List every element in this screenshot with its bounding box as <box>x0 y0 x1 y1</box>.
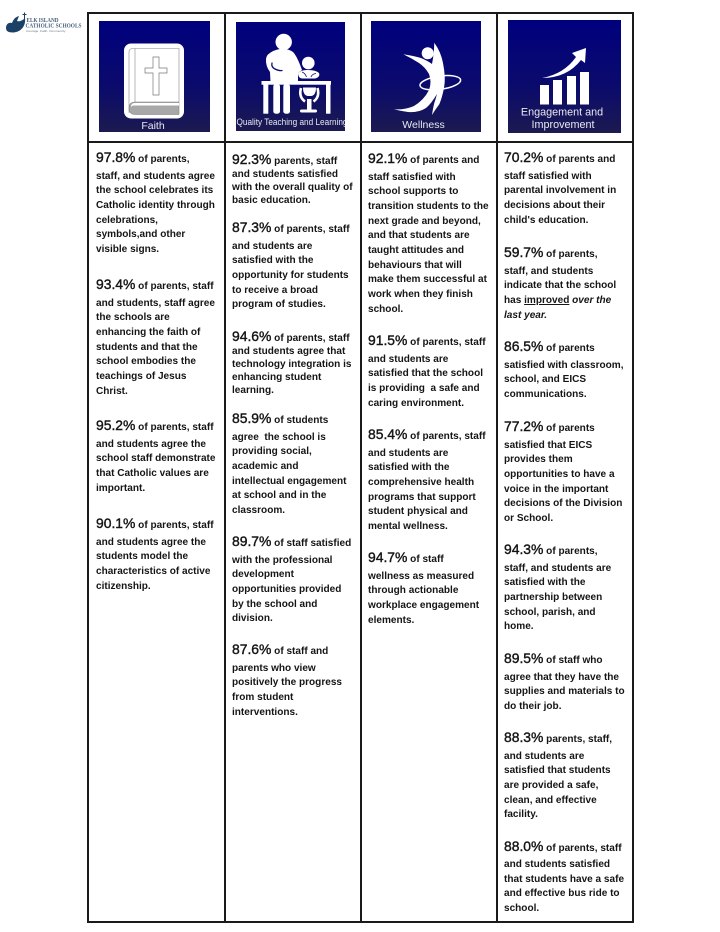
logo: Elk Island Catholic Schools: Courage. Faith. Community. <box>26 29 66 33</box>
stat: 92.1%: next grade and beyond, <box>368 216 481 227</box>
stat: 85.4%: mental wellness. <box>368 521 448 532</box>
icon: Engagement and Improvement <box>508 20 621 133</box>
stat: 93.4%: the schools are <box>96 312 170 323</box>
stat: 92.1%: and that students are <box>368 230 470 241</box>
stat: 92.3%: 92.3% parents, staff <box>232 151 337 167</box>
stat: 77.2%: provides them <box>504 454 573 465</box>
stat: 93.4%: 93.4% of parents, staff <box>96 276 214 292</box>
stat: 77.2%: 77.2% of parents <box>504 418 595 434</box>
stat: 87.6%: positively the progress <box>232 677 342 688</box>
stat: 85.9%: at school and in the <box>232 490 326 501</box>
column: Quality Teaching and Learning results <box>232 151 353 718</box>
stat: 87.6%: interventions. <box>232 707 298 718</box>
stat: 94.7% <box>368 549 479 626</box>
stat: 94.6%: learning. <box>232 385 274 396</box>
stat: 85.4%: comprehensive health <box>368 477 474 488</box>
stat: 94.6%: enhancing student <box>232 372 321 383</box>
stat: 92.1%: staff satisfied with <box>368 172 456 182</box>
stat: 89.5% <box>504 650 625 712</box>
stat: 77.2% <box>504 418 622 524</box>
stat: 89.5%: 89.5% of staff who <box>504 650 603 666</box>
stat: 95.2%: and students agree the <box>96 438 206 450</box>
stat: 94.7%: workplace engagement <box>368 600 479 611</box>
stat: 85.4%: programs that support <box>368 492 476 503</box>
stat: 91.5%: is providing a safe and <box>368 383 480 394</box>
icon: Wellness <box>371 21 481 132</box>
stat: 89.7%: with the professional <box>232 554 332 566</box>
stat: 88.0%: and students satisfied <box>504 859 610 870</box>
stat: 91.5%: 91.5% of parents, staff <box>368 332 486 348</box>
stat: 70.2%: staff satisfied with <box>504 170 592 182</box>
stat: 88.3%: satisfied that students <box>504 765 611 776</box>
stat: 89.7%: opportunities provided <box>232 584 341 595</box>
stat: 77.2%: or School. <box>504 513 553 524</box>
stat: 92.3%: with the overall quality of <box>232 182 353 193</box>
stat: 97.8%: celebrations, <box>96 215 158 226</box>
stat: 89.7%: division. <box>232 613 273 624</box>
stat: 93.4%: students and that the <box>96 342 198 353</box>
stat: 85.4%: and students are <box>368 448 448 458</box>
stat: 85.9%: 85.9% of students <box>232 410 328 426</box>
stat: 93.4%: teachings of Jesus <box>96 371 186 382</box>
stat: 94.3%: partnership between <box>504 592 602 603</box>
stat: 85.9%: academic and <box>232 461 298 472</box>
stat: 95.2%: school staff demonstrate <box>96 453 215 464</box>
stat: 77.2%: satisfied that EICS <box>504 440 592 450</box>
stat: 92.1%: 92.1% of parents and <box>368 150 479 166</box>
stat: 95.2% <box>96 417 216 494</box>
stat: 92.1%: school. <box>368 304 403 315</box>
stat: 94.6%: and students agree that <box>232 346 345 356</box>
stat: 89.7%: development <box>232 569 294 580</box>
stat: 86.5%: satisfied with classroom, <box>504 360 623 370</box>
stat: 97.8%: symbols,and other <box>96 229 185 240</box>
stat: 90.1%: 90.1% of parents, staff <box>96 515 214 531</box>
stat: 92.1%: transition students to the <box>368 201 489 212</box>
stat: 70.2%: 70.2% of parents and <box>504 149 615 165</box>
logo: Elk Island Catholic Schools: ELK ISLAND <box>26 18 58 24</box>
stat: 91.5% <box>368 332 486 409</box>
stat: 91.5%: caring environment. <box>368 398 464 409</box>
stat: 92.1%: make them successful at <box>368 274 487 285</box>
stat: 88.0%: that students have a safe <box>504 874 624 885</box>
stat: 95.2%: important. <box>96 483 145 494</box>
stat: 92.3%: basic education. <box>232 195 311 206</box>
stat: 85.4%: student physical and <box>368 506 468 517</box>
stat: 86.5% <box>504 338 623 400</box>
stat: 95.2%: that Catholic values are <box>96 468 209 479</box>
stat: 89.5%: agree that they have the <box>504 672 619 682</box>
icon: Wellness: Wellness <box>402 119 445 131</box>
stat: 94.6%: technology integration is <box>232 359 351 370</box>
stat: 85.9%: intellectual engagement <box>232 476 346 487</box>
stat: 87.3%: program of studies. <box>232 299 326 310</box>
stat: 86.5%: school, and EICS <box>504 374 586 385</box>
logo: Elk Island Catholic Schools <box>6 12 82 33</box>
stat: 88.0%: and effective bus ride to <box>504 888 620 899</box>
stat: 87.3%: 87.3% of parents, staff <box>232 219 350 235</box>
stat: 77.2%: voice in the important <box>504 484 608 495</box>
stat: 90.1%: students model the <box>96 551 188 562</box>
stat: 88.0%: school. <box>504 903 539 914</box>
stat: 93.4% <box>96 276 215 397</box>
stat: 87.3%: and students are <box>232 240 312 252</box>
stat: 88.3%: clean, and effective <box>504 795 597 806</box>
stat: 85.4%: 85.4% of parents, staff <box>368 426 486 442</box>
stat: 88.3%: are provided a safe, <box>504 780 598 791</box>
stat: 94.6%: 94.6% of parents, staff <box>232 328 350 344</box>
stat: 97.8%: Catholic identity through <box>96 200 215 211</box>
stat: 87.3% <box>232 219 350 310</box>
stat: 93.4%: and students, staff agree <box>96 298 215 308</box>
icon: Faith bible <box>99 21 210 132</box>
stat: 85.4% <box>368 426 486 532</box>
stat: 95.2%: 95.2% of parents, staff <box>96 417 214 433</box>
stat: 88.3%: 88.3% parents, staff, <box>504 729 612 745</box>
stat: 91.5%: satisfied that the school <box>368 368 483 379</box>
stat: 88.3%: and students are <box>504 750 584 762</box>
stat: 85.9%: providing social, <box>232 446 312 457</box>
stat: 94.3%: staff, and students are <box>504 562 611 574</box>
stat: 59.7%: has improved over the <box>504 295 611 306</box>
stat: 70.2% <box>504 149 616 226</box>
stat: 87.3%: to receive a broad <box>232 285 318 296</box>
stat: 92.3%: and students satisfied <box>232 168 338 180</box>
stat: 89.5%: do their job. <box>504 701 562 712</box>
column: Wellness results <box>368 150 489 626</box>
stat: 89.7%: 89.7% of staff satisfied <box>232 533 351 549</box>
stat: 88.3%: facility. <box>504 809 538 820</box>
stat: 94.7%: wellness as measured <box>368 570 474 582</box>
stat: 88.0%: 88.0% of parents, staff <box>504 838 622 854</box>
stat: 94.3%: 94.3% of parents, <box>504 541 598 557</box>
stat: 59.7%: 59.7% of parents, <box>504 244 598 260</box>
stat: 89.5%: supplies and materials to <box>504 686 625 697</box>
stat: 70.2%: parental involvement in <box>504 185 616 196</box>
stat: 94.7%: elements. <box>368 615 414 626</box>
stat: 88.0% <box>504 838 624 914</box>
stat: 92.1%: work when they finish <box>368 289 473 300</box>
stat: 94.6% <box>232 328 352 396</box>
stat: 93.4%: school embodies the <box>96 356 196 367</box>
stat: 91.5%: and students are <box>368 354 448 364</box>
stat: 87.3%: opportunity for students <box>232 270 349 281</box>
stat: 92.1%: behaviours that will <box>368 260 462 271</box>
stat: 89.7%: by the school and <box>232 599 317 610</box>
stat: 90.1%: citizenship. <box>96 581 151 592</box>
stat: 97.8%: the school celebrates its <box>96 185 213 196</box>
stat: 86.5%: 86.5% of parents <box>504 338 595 354</box>
icon: Quality Teaching and Learning <box>236 22 345 131</box>
stat: 87.3%: satisfied with the <box>232 255 314 266</box>
icon: Faith bible: Faith <box>141 120 165 132</box>
icon: Engagement and Improvement: Engagement and <box>521 106 603 118</box>
stat: 85.9%: agree the school is <box>232 432 326 442</box>
column: Faith results <box>96 149 216 592</box>
stat: 94.3%: home. <box>504 621 534 632</box>
stat: 88.3% <box>504 729 612 820</box>
stat: 92.1% <box>368 150 489 315</box>
stat: 94.3%: satisfied with the <box>504 577 586 588</box>
stat: 90.1%: and students agree the <box>96 536 206 548</box>
stat: 77.2%: opportunities to have a <box>504 469 615 480</box>
stat: 85.9%: classroom. <box>232 505 285 516</box>
stat: 59.7%: indicate that the school <box>504 280 616 291</box>
stat: 97.8%: 97.8% of parents, <box>96 149 190 165</box>
stat: 92.1%: school supports to <box>368 186 458 197</box>
stat: 92.3% <box>232 151 353 206</box>
stat: 77.2%: decisions of the Division <box>504 498 622 509</box>
stat: 87.6%: 87.6% of staff and <box>232 641 328 657</box>
stat: 87.6%: parents who view <box>232 662 316 674</box>
stat: 85.9% <box>232 410 346 516</box>
stat: 70.2%: decisions about their <box>504 200 605 211</box>
stat: 70.2%: child's education. <box>504 215 588 226</box>
stat: 59.7%: staff, and students <box>504 266 593 276</box>
stat: 94.3% <box>504 541 611 632</box>
stat: 87.6%: from student <box>232 692 293 703</box>
stat: 90.1%: characteristics of active <box>96 566 210 577</box>
stat: 92.1%: taught attitudes and <box>368 245 464 256</box>
stat: 59.7%: last year. <box>504 310 547 321</box>
stat: 97.8%: visible signs. <box>96 244 159 255</box>
column: Engagement and Improvement results <box>504 149 625 914</box>
stat: 97.8%: staff, and students agree <box>96 170 215 182</box>
stat: 94.7%: 94.7% of staff <box>368 549 444 565</box>
icon: Engagement and Improvement: Improvement <box>531 119 595 131</box>
stat: 87.6% <box>232 641 342 718</box>
stat: 97.8% <box>96 149 215 255</box>
stat: 94.7%: through actionable <box>368 585 458 596</box>
stat: 86.5%: communications. <box>504 389 587 400</box>
stat: 94.3%: school, parish, and <box>504 607 596 618</box>
stat: 93.4%: enhancing the faith of <box>96 327 200 338</box>
stat: 85.4%: satisfied with the <box>368 462 450 473</box>
stat: 90.1% <box>96 515 214 592</box>
stat: 93.4%: Christ. <box>96 386 128 397</box>
stat: 89.7% <box>232 533 351 624</box>
stat: 59.7% <box>504 244 616 321</box>
